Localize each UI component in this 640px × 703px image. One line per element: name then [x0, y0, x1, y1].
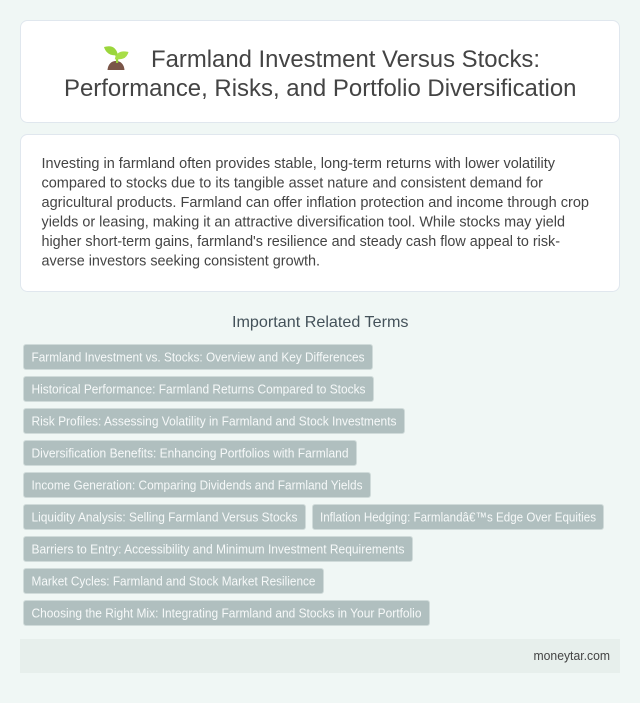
tag: inflation hedging — [312, 504, 604, 530]
panel: intro paragraph — [20, 134, 620, 292]
tag: liquidity analysis — [24, 504, 306, 530]
heading: important related terms: Important Related Terms — [232, 314, 408, 331]
panel: title card — [20, 20, 620, 122]
tag: overview — [24, 344, 372, 370]
tag: historical performance: Historical Performance: Farmland Returns Compared to Stocks — [32, 382, 366, 396]
tag: market cycles: Market Cycles: Farmland and Stock Market Resilience — [32, 574, 316, 588]
text block: paragraph: agricultural products. Farmland can offer inflation protection and income through crop — [42, 195, 589, 211]
heading: title: Farmland Investment Versus Stocks: — [151, 46, 540, 73]
tag: market cycles — [24, 568, 324, 594]
tag: choosing the right mix — [24, 600, 430, 626]
heading: title — [64, 46, 576, 102]
text block: paragraph: compared to stocks due to its tangible asset nature and consistent demand for — [42, 176, 543, 192]
tag: diversification benefits: Diversification Benefits: Enhancing Portfolios with Farmland — [32, 446, 348, 460]
heading: title: Performance, Risks, and Portfolio Diversification — [64, 75, 576, 102]
tag: historical performance — [24, 376, 374, 402]
tag: risk profiles: Risk Profiles: Assessing Volatility in Farmland and Stock Investments — [32, 414, 397, 428]
tag: diversification benefits — [24, 440, 356, 466]
tag: income generation — [24, 472, 370, 498]
footer source text: moneytar.com — [534, 648, 610, 663]
text block: paragraph: averse investors seeking consistent growth. — [42, 254, 320, 270]
footer bar — [20, 639, 620, 673]
icon: sprout emoji — [104, 46, 128, 70]
tag: inflation hedging: Inflation Hedging: Farmlandâ€™s Edge Over Equities — [320, 510, 596, 524]
tag: income generation: Income Generation: Comparing Dividends and Farmland Yields — [32, 478, 363, 492]
tag: liquidity analysis: Liquidity Analysis: Selling Farmland Versus Stocks — [32, 510, 298, 524]
tag: risk profiles — [24, 408, 404, 434]
text block: paragraph: yields or leasing, making it an attractive diversification tool. While stocks may yield — [42, 214, 565, 230]
tag: barriers to entry: Barriers to Entry: Accessibility and Minimum Investment Requirements — [32, 542, 405, 556]
tag: barriers to entry — [24, 536, 412, 562]
text block: paragraph: Investing in farmland often provides stable, long-term returns with lower volatility — [42, 156, 556, 172]
tag: overview: Farmland Investment vs. Stocks: Overview and Key Differences — [32, 350, 365, 364]
tag: choosing the right mix: Choosing the Right Mix: Integrating Farmland and Stocks in Your Portfolio — [32, 606, 422, 620]
text block: paragraph — [42, 156, 589, 270]
text block: paragraph: higher short-term gains, farmland's resilience and steady cash flow appeal to risk- — [42, 234, 560, 250]
